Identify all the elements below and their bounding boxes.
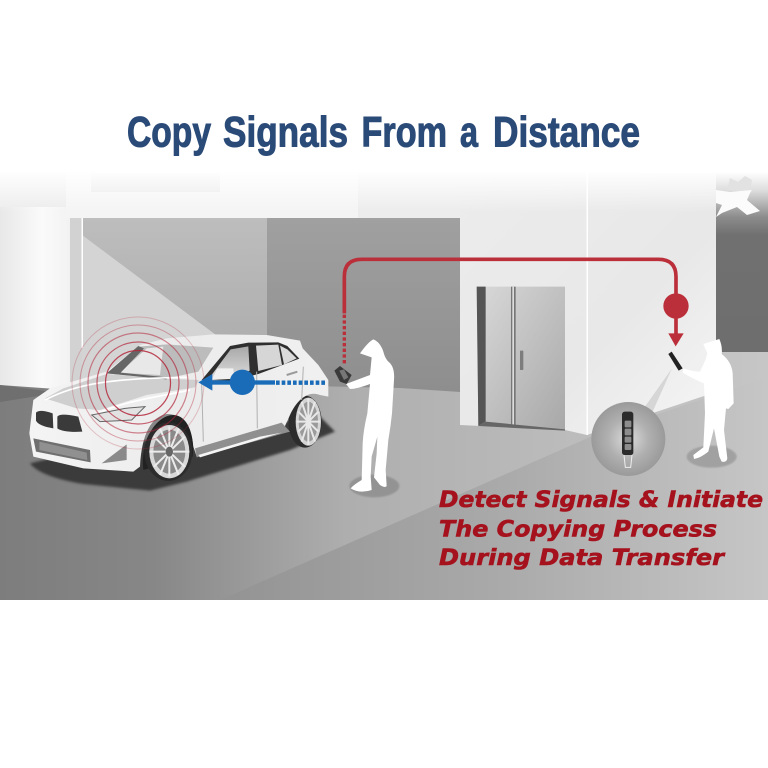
- sill: [195, 423, 290, 457]
- windshield dark base: [107, 346, 167, 379]
- person: thief near building: [645, 339, 737, 468]
- rear door window: [256, 345, 282, 371]
- wall: ceiling beam: [66, 172, 358, 218]
- car body: [29, 334, 328, 472]
- wall: back section: [267, 218, 460, 392]
- wall: white corner line: [82, 218, 83, 348]
- wall: shadow wedge at pillar base: [0, 385, 70, 402]
- handheld device: [334, 366, 352, 384]
- door handle: [287, 372, 297, 375]
- floor: area above the diagonal: [0, 345, 768, 600]
- arrow: red copied signal path: [344, 259, 689, 364]
- front door window: [208, 346, 250, 379]
- callout text: Detect Signals & Initiate: [439, 487, 763, 513]
- front wheel arch: [143, 415, 193, 470]
- wall: middle section: [82, 218, 268, 388]
- lower intake: [33, 438, 91, 462]
- title: Distance: [493, 108, 640, 156]
- title: a: [460, 108, 479, 156]
- title: Signals: [223, 108, 348, 156]
- icon: remote key fob lens: [591, 402, 665, 476]
- front wheel: [144, 422, 192, 481]
- arrow: blue signal from car door: [198, 370, 325, 395]
- building corner line: [586, 172, 588, 435]
- wall: dark outer wall: [716, 172, 768, 352]
- quarter window: [280, 346, 297, 364]
- title: [127, 108, 640, 156]
- beam to zoom lens: [645, 368, 672, 412]
- wall: left pillar: [0, 207, 70, 390]
- panel: garage scene background: [0, 170, 768, 600]
- elevator doors: [477, 287, 565, 431]
- callout text: [439, 487, 763, 571]
- front mirror: [212, 368, 234, 380]
- fog inlet: [102, 444, 127, 463]
- floor: lower diagonal band: [220, 377, 768, 600]
- wall: recess strip: [70, 218, 82, 388]
- person: thief near car: [334, 339, 399, 497]
- callout text: The Copying Process: [439, 516, 717, 542]
- top fade to white: [0, 170, 716, 212]
- windshield: [107, 344, 213, 379]
- wall: light falling on wall: [82, 235, 216, 390]
- building block: [460, 172, 716, 435]
- title: Copy: [127, 108, 211, 156]
- windshield reflection: [120, 347, 163, 375]
- bumper band: [39, 442, 87, 460]
- icon: tree silhouette: [716, 176, 760, 217]
- left grille kidney: [36, 411, 53, 428]
- wall: beam panel: [91, 173, 220, 192]
- rear wheel: [288, 396, 322, 448]
- hood panel: [45, 374, 199, 410]
- phone scanner: [668, 352, 683, 371]
- sill highlight: [198, 433, 282, 457]
- side window frame: [202, 342, 299, 381]
- signal rings: [72, 317, 204, 449]
- title: From: [362, 108, 447, 156]
- right grille kidney: [57, 415, 82, 432]
- hood highlight: [45, 377, 190, 415]
- door seam: [202, 367, 303, 442]
- callout text: During Data Transfer: [439, 545, 726, 571]
- car shadow: [30, 417, 335, 491]
- headlight: [92, 407, 145, 422]
- car illustration: [29, 334, 335, 491]
